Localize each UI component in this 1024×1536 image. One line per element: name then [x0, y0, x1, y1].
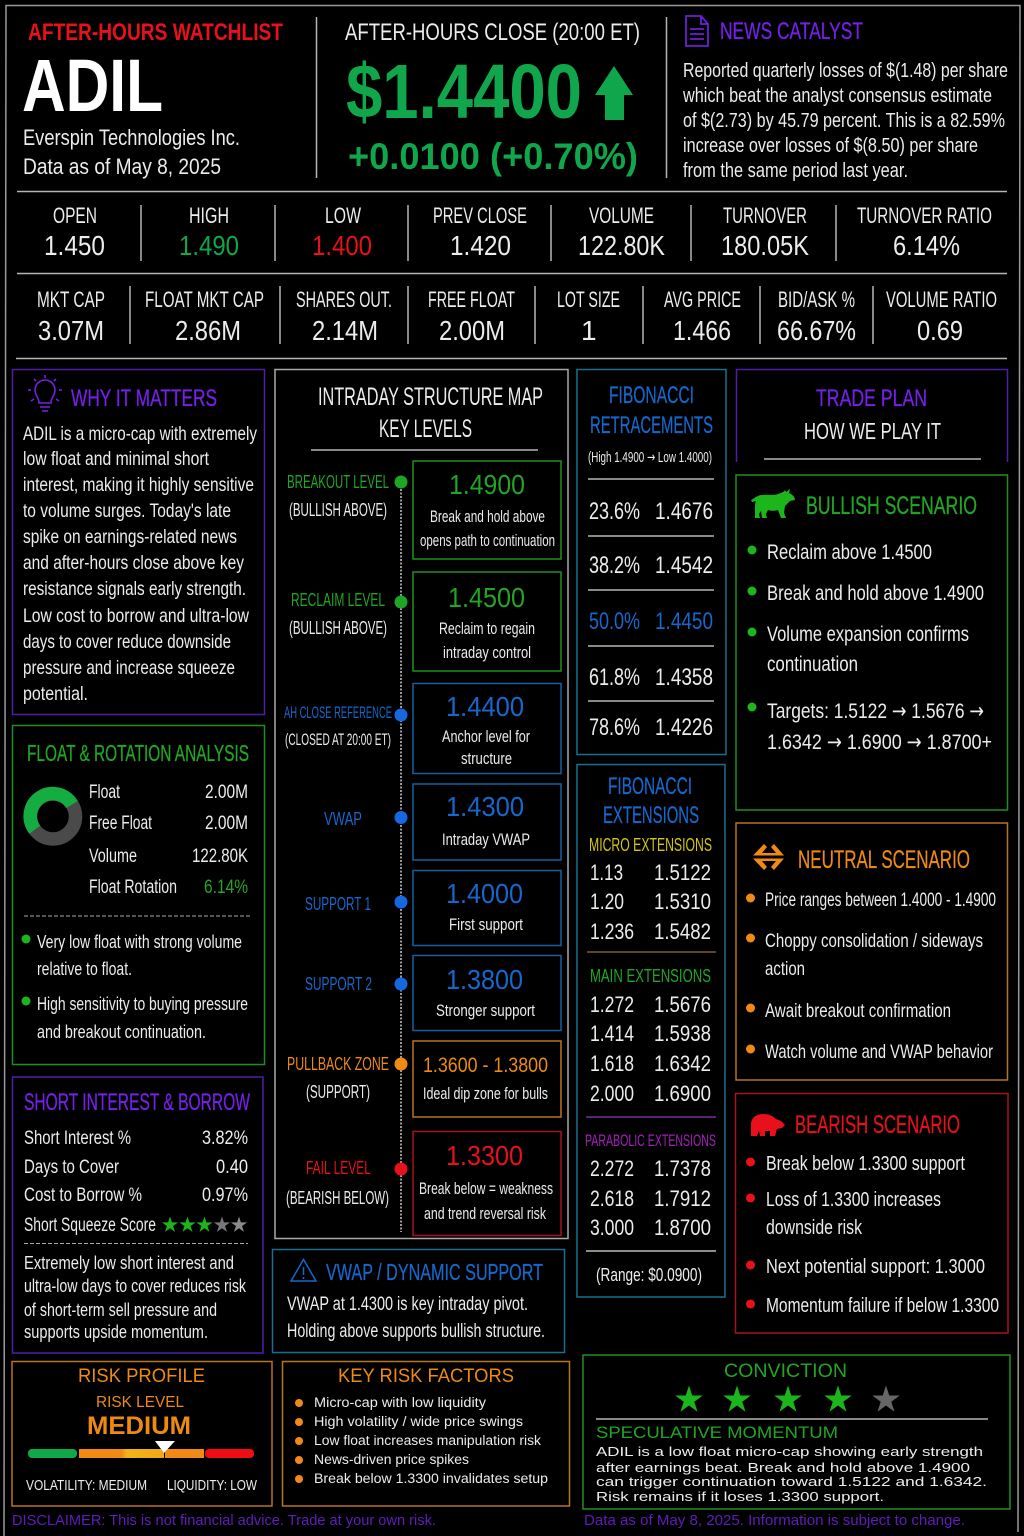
ticker: ADIL	[22, 44, 163, 127]
stat: float market cap	[145, 287, 264, 346]
main extensions	[590, 966, 711, 1106]
retracement levels: 61.8%	[589, 664, 640, 691]
stat: lot size: LOT SIZE	[557, 287, 620, 312]
icon: document	[686, 16, 708, 46]
body text: ADIL is a micro-cap with extremely	[23, 423, 257, 445]
parabolic extensions	[585, 1131, 716, 1240]
level: support 1: First support	[449, 915, 523, 934]
retracement levels: 1.4676	[655, 498, 713, 525]
float notes: Very low float with strong volume	[37, 932, 242, 952]
level: after-hours close reference: AH CLOSE REFERENCE	[284, 703, 392, 722]
heading: CONVICTION	[724, 1361, 847, 1382]
short metrics table: Short Squeeze Score	[24, 1215, 156, 1236]
news text: from the same period last year.	[683, 159, 908, 182]
vwap note: VWAP at 1.4300 is key intraday pivot.	[287, 1294, 528, 1315]
stat: bid/ask: 66.67%	[777, 315, 856, 346]
stat: open	[44, 203, 105, 261]
heading: FIBONACCI	[609, 382, 694, 409]
range note: (High 1.4900 → Low 1.4000)	[588, 450, 712, 466]
heading: SHORT INTEREST & BORROW	[24, 1089, 250, 1116]
header: news catalyst	[682, 16, 1008, 182]
main extensions: 1.5938	[654, 1021, 711, 1046]
micro extensions: 1.5310	[654, 889, 711, 914]
level: breakout	[287, 461, 561, 559]
heading	[590, 382, 713, 439]
parabolic extensions: PARABOLIC EXTENSIONS	[585, 1131, 716, 1150]
main extensions: 1.6342	[654, 1051, 711, 1076]
stat: low: 1.400	[312, 230, 372, 261]
panel: vwap dynamic support	[272, 1250, 564, 1352]
stat: turnover ratio	[857, 203, 992, 261]
float metrics table: 6.14%	[204, 877, 248, 898]
micro extensions	[589, 835, 712, 944]
float metrics table: 122.80K	[192, 846, 248, 867]
parabolic extensions: 3.000	[590, 1215, 634, 1240]
level: support 1: 1.4000	[446, 878, 523, 909]
stat: low: LOW	[325, 203, 361, 228]
panel: neutral scenario	[736, 823, 1008, 1080]
stat: avg price	[664, 287, 741, 346]
short interest note: supports upside momentum.	[24, 1322, 208, 1342]
float notes: and breakout continuation.	[37, 1022, 206, 1042]
level: vwap: VWAP	[324, 809, 362, 829]
stat: volume ratio: 0.69	[917, 315, 963, 346]
level: reclaim	[289, 572, 561, 671]
risk gauge bar	[28, 1441, 254, 1458]
panel: why it matters	[12, 370, 264, 714]
neutral bullet list: action	[765, 958, 805, 980]
retracement levels: 1.4226	[655, 714, 713, 741]
stat: high: 1.490	[179, 230, 239, 261]
body text: to volume surges. Today's late	[23, 500, 231, 522]
float metrics table	[89, 782, 248, 898]
level: support 1: SUPPORT 1	[305, 894, 371, 914]
micro extensions: 1.236	[590, 919, 634, 944]
bearish bullet list: Break below 1.3300 support	[766, 1152, 965, 1175]
header: after-hours close	[345, 19, 640, 177]
main extensions: 1.414	[590, 1021, 634, 1046]
stat: open: 1.450	[44, 230, 105, 261]
icon: two-way arrows	[753, 844, 784, 870]
vwap note: Holding above supports bullish structure.	[287, 1321, 545, 1342]
heading: RETRACEMENTS	[590, 412, 713, 439]
retracement levels: 78.6%	[589, 714, 640, 741]
watchlist label: AFTER-HOURS WATCHLIST	[28, 19, 283, 46]
parabolic extensions: 1.7912	[654, 1186, 711, 1211]
stat: turnover: 180.05K	[721, 230, 809, 261]
stat: free float: 2.00M	[439, 315, 505, 346]
stats row 1	[44, 203, 992, 261]
data note: Data as of May 8, 2025. Information is subject to change.	[584, 1512, 965, 1529]
level: after-hours close reference: 1.4400	[446, 691, 524, 722]
conviction summary: can trigger continuation toward 1.5122 and 1.6342.	[596, 1474, 987, 1489]
stat: avg price: 1.466	[673, 315, 731, 346]
body text: low float and minimal short	[23, 448, 209, 470]
stat: shares out	[296, 287, 392, 346]
stat: volume: VOLUME	[589, 203, 654, 228]
conviction summary	[596, 1444, 987, 1504]
stat: open: OPEN	[53, 203, 97, 228]
retracement levels: 50.0%	[589, 608, 640, 635]
level: pullback zone: (SUPPORT)	[306, 1082, 370, 1102]
parabolic extensions: 2.272	[590, 1156, 634, 1181]
level: reclaim: Reclaim to regain	[439, 619, 535, 638]
stat: prev close	[433, 203, 527, 261]
stat: turnover	[721, 203, 809, 261]
stat: lot size: 1	[581, 315, 597, 346]
level: pullback zone: PULLBACK ZONE	[287, 1054, 389, 1074]
disclaimer: DISCLAIMER: This is not financial advice. Trade at your own risk.	[12, 1512, 436, 1529]
short interest note: Extremely low short interest and	[24, 1253, 234, 1273]
bullish bullet list: continuation	[767, 652, 858, 676]
level: reclaim: 1.4500	[448, 582, 525, 613]
stat: market cap: MKT CAP	[37, 287, 105, 312]
stat: volume	[578, 203, 665, 261]
panel: bearish scenario	[736, 1094, 1008, 1333]
heading: KEY RISK FACTORS	[338, 1366, 514, 1387]
heading: FLOAT & ROTATION ANALYSIS	[27, 740, 249, 766]
bearish bullet list: Loss of 1.3300 increases	[766, 1188, 941, 1211]
vwap note	[287, 1294, 545, 1342]
main extensions: 1.6900	[654, 1081, 711, 1106]
stat: shares out: 2.14M	[312, 315, 378, 346]
risk level label: RISK LEVEL	[96, 1394, 184, 1411]
stat: bid/ask: BID/ASK %	[778, 287, 855, 312]
level: after-hours close reference: (CLOSED AT 20:00 ET)	[285, 730, 391, 749]
liquidity label: LIQUIDITY: LOW	[167, 1477, 258, 1494]
float metrics table: 2.00M	[205, 782, 248, 803]
level: breakout: 1.4900	[449, 469, 525, 500]
level: support 2	[305, 956, 561, 1030]
risk level value: MEDIUM	[87, 1412, 191, 1440]
body text: and after-hours close above key	[23, 552, 244, 574]
stat: free float: FREE FLOAT	[428, 287, 515, 312]
conviction summary: Risk remains if it loses 1.3300 support.	[596, 1489, 884, 1504]
heading: VWAP / DYNAMIC SUPPORT	[326, 1259, 543, 1285]
stat: market cap	[37, 287, 105, 346]
stat: free float	[428, 287, 515, 346]
level: vwap: Intraday VWAP	[442, 830, 530, 849]
main extensions: 1.5676	[654, 992, 711, 1017]
level: reclaim: (BULLISH ABOVE)	[289, 618, 387, 638]
level: vwap: 1.4300	[446, 791, 524, 822]
float metrics table: 2.00M	[205, 813, 248, 834]
news text	[682, 59, 1008, 182]
neutral bullet list	[746, 889, 996, 1063]
body text: resistance signals early strength.	[23, 578, 246, 600]
level: after-hours close reference: structure	[461, 749, 512, 768]
news heading: NEWS CATALYST	[720, 18, 863, 45]
risk factors list	[295, 1395, 548, 1486]
retracement levels: 23.6%	[589, 498, 640, 525]
bearish bullet list	[746, 1152, 999, 1317]
short metrics table: Days to Cover	[24, 1157, 120, 1178]
float metrics table: Free Float	[89, 813, 153, 834]
micro extensions: 1.13	[590, 860, 623, 885]
heading: TRADE PLAN	[816, 385, 927, 412]
level: vwap	[324, 784, 561, 860]
retracement levels	[589, 498, 713, 741]
conviction stars	[675, 1386, 900, 1412]
risk factors list: Micro-cap with low liquidity	[314, 1395, 486, 1410]
data date: Data as of May 8, 2025	[23, 154, 221, 179]
level: pullback zone: 1.3600 - 1.3800	[423, 1054, 548, 1077]
stat: volume ratio	[886, 287, 997, 346]
stat: volume: 122.80K	[578, 230, 665, 261]
stat: turnover ratio: 6.14%	[893, 230, 960, 261]
level: breakout: opens path to continuation	[420, 531, 555, 550]
subheading: KEY LEVELS	[379, 415, 472, 443]
level: breakout: BREAKOUT LEVEL	[287, 472, 389, 492]
stat: float market cap: FLOAT MKT CAP	[145, 287, 264, 312]
panel: short interest and borrow	[12, 1077, 263, 1353]
panel: fibonacci retracements	[577, 370, 726, 754]
volatility label: VOLATILITY: MEDIUM	[26, 1477, 147, 1494]
short metrics table: Cost to Borrow %	[24, 1185, 142, 1206]
retracement levels: 1.4450	[655, 608, 713, 635]
main extensions: 1.272	[590, 992, 634, 1017]
stats row 2	[37, 286, 997, 346]
bullish bullet list: Reclaim above 1.4500	[767, 540, 932, 564]
subheading: SPECULATIVE MOMENTUM	[596, 1423, 838, 1442]
squeeze score stars	[162, 1216, 247, 1232]
body text: potential.	[23, 683, 88, 705]
heading	[603, 773, 699, 829]
bullish bullet list	[748, 540, 992, 755]
short metrics table	[24, 1128, 248, 1236]
price change: +0.0100 (+0.70%)	[348, 136, 638, 177]
stat: prev close: PREV CLOSE	[433, 203, 527, 228]
level: support 1	[305, 870, 561, 946]
float metrics table: Volume	[89, 846, 137, 867]
heading: WHY IT MATTERS	[71, 385, 217, 412]
bullish bullet list: Targets: 1.5122 → 1.5676 →	[767, 699, 984, 724]
panel: key risk factors	[282, 1362, 570, 1506]
float metrics table: Float Rotation	[89, 877, 177, 898]
company name: Everspin Technologies Inc.	[23, 125, 240, 150]
level: fail: Break below = weakness	[419, 1179, 553, 1198]
body text: interest, making it highly sensitive	[23, 474, 254, 496]
stat: bid/ask	[777, 287, 856, 346]
short interest note: ultra-low days to cover reduces risk	[24, 1276, 247, 1296]
stat: prev close: 1.420	[450, 230, 511, 261]
icon: warning triangle	[291, 1260, 316, 1281]
stat: turnover: TURNOVER	[723, 203, 807, 228]
risk factors list: Break below 1.3300 invalidates setup	[314, 1471, 548, 1486]
level: support 2: Stronger support	[436, 1001, 535, 1020]
micro extensions: 1.5482	[654, 919, 711, 944]
level: fail: FAIL LEVEL	[306, 1158, 371, 1178]
stat: high: HIGH	[189, 203, 229, 228]
level: pullback zone	[287, 1041, 561, 1117]
conviction summary: after earnings beat. Break and hold above 1.4900	[596, 1460, 970, 1475]
stat: low	[312, 203, 372, 261]
level: support 2: 1.3800	[446, 964, 523, 995]
level: support 2: SUPPORT 2	[305, 974, 372, 994]
body text	[23, 423, 257, 705]
parabolic extensions: 2.618	[590, 1186, 634, 1211]
bearish bullet list: downside risk	[766, 1216, 863, 1239]
level: after-hours close reference	[284, 684, 561, 774]
conviction summary: ADIL is a low float micro-cap showing early strength	[596, 1444, 983, 1459]
level: fail: 1.3300	[446, 1140, 523, 1171]
micro extensions: 1.20	[590, 889, 624, 914]
short metrics table: 3.82%	[202, 1128, 248, 1149]
short interest note	[24, 1253, 247, 1342]
donut chart	[30, 794, 76, 839]
level: breakout: Break and hold above	[430, 507, 545, 526]
short metrics table: 0.97%	[202, 1185, 248, 1206]
level: reclaim: RECLAIM LEVEL	[291, 590, 385, 610]
header: ticker block	[22, 19, 283, 179]
level: fail	[286, 1132, 561, 1236]
panel: trade plan header	[736, 370, 1008, 462]
panel: risk profile	[12, 1362, 272, 1506]
retracement levels: 1.4358	[655, 664, 713, 691]
close price: $1.4400	[346, 49, 582, 135]
level: breakout: (BULLISH ABOVE)	[289, 500, 387, 520]
range note: (Range: $0.0900)	[596, 1265, 702, 1285]
short metrics table: 0.40	[216, 1157, 248, 1178]
float metrics table: Float	[89, 782, 121, 803]
risk factors list: News-driven price spikes	[314, 1452, 469, 1467]
level: fail: (BEARISH BELOW)	[286, 1188, 389, 1208]
main extensions: 1.618	[590, 1051, 634, 1076]
level: pullback zone: Ideal dip zone for bulls	[423, 1084, 548, 1103]
body text: pressure and increase squeeze	[23, 657, 235, 679]
bullish bullet list: 1.6342 → 1.6900 → 1.8700+	[767, 730, 992, 755]
heading: FIBONACCI	[608, 773, 692, 800]
parabolic extensions: 1.7378	[654, 1156, 711, 1181]
micro extensions: MICRO EXTENSIONS	[589, 835, 712, 855]
icon: bull	[751, 489, 795, 518]
retracement levels: 1.4542	[655, 552, 713, 579]
float notes	[22, 932, 248, 1042]
level: after-hours close reference: Anchor level for	[442, 727, 530, 746]
neutral bullet list: Await breakout confirmation	[765, 1000, 951, 1022]
stat: lot size	[557, 287, 620, 346]
parabolic extensions: 1.8700	[654, 1215, 711, 1240]
close label: AFTER-HOURS CLOSE (20:00 ET)	[345, 19, 640, 46]
stat: avg price: AVG PRICE	[664, 287, 741, 312]
panel: fibonacci extensions	[577, 764, 725, 1297]
stat: float market cap: 2.86M	[175, 315, 241, 346]
retracement levels: 38.2%	[589, 552, 640, 579]
short metrics table: Short Interest %	[24, 1128, 131, 1149]
icon: light bulb	[28, 375, 62, 411]
body text: Low cost to borrow and ultra-low	[23, 605, 250, 627]
float notes: High sensitivity to buying pressure	[37, 994, 248, 1014]
panel: bullish scenario	[736, 475, 1008, 810]
panel: float and rotation analysis	[12, 726, 264, 1064]
main extensions: 2.000	[590, 1081, 634, 1106]
panel: conviction	[583, 1355, 1010, 1509]
short interest note: of short-term sell pressure and	[24, 1300, 217, 1320]
heading: EXTENSIONS	[603, 802, 699, 829]
heading: INTRADAY STRUCTURE MAP	[318, 383, 543, 411]
icon: bear	[751, 1114, 785, 1136]
risk factors list: High volatility / wide price swings	[314, 1414, 523, 1429]
main extensions: MAIN EXTENSIONS	[590, 966, 711, 986]
micro extensions: 1.5122	[654, 860, 711, 885]
body text: days to cover reduce downside	[23, 631, 231, 653]
stat: shares out: SHARES OUT.	[296, 287, 392, 312]
panel: intraday structure map	[275, 370, 568, 1238]
bullish bullet list: Volume expansion confirms	[767, 622, 969, 646]
stat: market cap: 3.07M	[38, 315, 104, 346]
level: reclaim: intraday control	[443, 643, 531, 662]
subheading: HOW WE PLAY IT	[804, 418, 941, 444]
stat: high	[179, 203, 239, 261]
risk factors list: Low float increases manipulation risk	[314, 1433, 541, 1448]
level: fail: and trend reversal risk	[424, 1204, 546, 1223]
heading: RISK PROFILE	[78, 1366, 205, 1387]
icon: up arrow	[595, 66, 633, 120]
float notes: relative to float.	[37, 959, 132, 979]
body text: spike on earnings-related news	[23, 526, 237, 548]
